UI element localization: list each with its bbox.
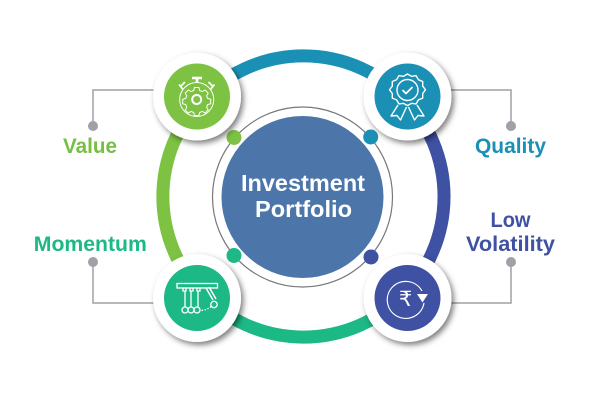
connector: momentum [88, 257, 156, 303]
label: low volatility: Low [490, 209, 531, 232]
label: value: Value [63, 135, 117, 158]
label: momentum: Momentum [34, 233, 147, 256]
connector: value [88, 90, 156, 131]
label: quality: Quality [475, 135, 546, 158]
thin inner ring [212, 107, 392, 287]
centre circle [222, 116, 384, 278]
centre title [241, 170, 365, 222]
label: low volatility [466, 209, 555, 256]
ring dots [226, 130, 378, 264]
centre title: Investment [241, 170, 365, 196]
outer ring [163, 56, 444, 337]
icon: newton's cradle [177, 284, 218, 313]
badge: low volatility rupee [364, 254, 452, 342]
connector: quality [448, 90, 516, 131]
icon: stopwatch gear [179, 78, 214, 116]
badge: value stopwatch [153, 52, 241, 140]
badge: momentum cradle [153, 254, 241, 342]
centre title: Portfolio [255, 196, 352, 222]
label: low volatility: Volatility [466, 233, 555, 256]
icon: rosette with ribbons [390, 74, 425, 120]
icon: rupee cycle: ₹ [399, 287, 412, 311]
connector: low volatility [448, 257, 516, 303]
badge: quality rosette [364, 52, 452, 140]
